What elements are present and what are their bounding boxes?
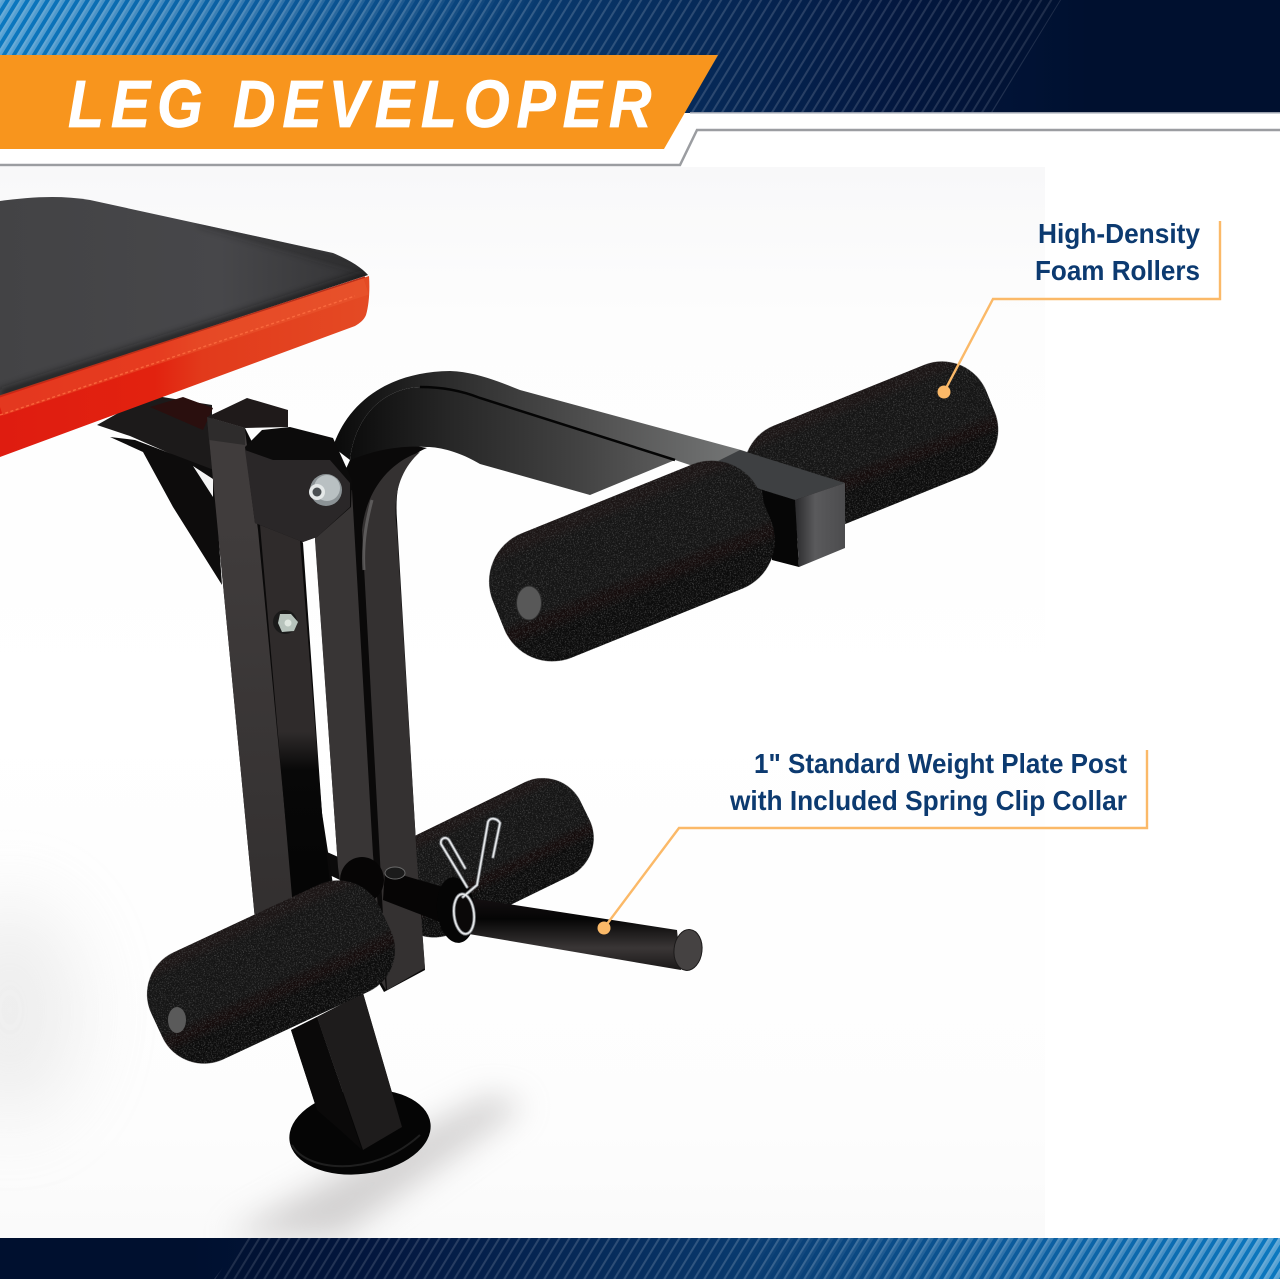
- header band: [0, 0, 1280, 114]
- leader dot: [938, 386, 950, 398]
- pivot bolt: [309, 474, 342, 506]
- tube highlight: [364, 500, 372, 570]
- plate post: [383, 867, 704, 972]
- tube left face: [315, 490, 386, 990]
- angled brace: [110, 437, 222, 585]
- title banner: [0, 55, 718, 149]
- roller end cap: [516, 586, 542, 620]
- pivot arm: [333, 371, 845, 500]
- title: LEG DEVELOPER: [68, 68, 652, 142]
- main upright: [207, 417, 340, 950]
- rear lower roller: [369, 764, 608, 952]
- front lower roller: [132, 865, 410, 1079]
- lower roller end cap: [168, 1007, 186, 1033]
- foot cast shadow: [225, 1095, 525, 1237]
- rear top foam roller: [729, 347, 1013, 553]
- callout text: High-Density: [1038, 218, 1200, 249]
- column over plate: [291, 993, 402, 1150]
- callout text: [1035, 218, 1200, 286]
- seat seam: [0, 277, 365, 396]
- post shaft: [463, 897, 681, 970]
- post nut: [385, 867, 405, 879]
- arm side: [350, 387, 675, 495]
- upright inner face: [260, 525, 332, 920]
- post weld blob: [340, 857, 384, 903]
- base plate rim: [292, 1135, 420, 1166]
- callout text: Foam Rollers: [1035, 255, 1200, 286]
- spring clip collar: [441, 819, 500, 935]
- front top foam roller: [473, 445, 791, 677]
- photo backdrop: [0, 167, 1045, 1238]
- post inner section: [383, 870, 443, 922]
- leader line: [944, 221, 1220, 392]
- product: leg developer bench: [0, 197, 1013, 1182]
- base plate: [284, 1082, 436, 1182]
- callout text: [729, 748, 1127, 816]
- leader dot: [598, 922, 610, 934]
- collar: [434, 875, 478, 945]
- curved support tube: [315, 440, 427, 992]
- tube right face: [362, 452, 425, 990]
- callout: weight plate post: [598, 748, 1147, 934]
- plate post back section: [290, 836, 345, 880]
- callout: foam rollers: [938, 218, 1220, 398]
- callout text: with Included Spring Clip Collar: [729, 785, 1127, 816]
- upright cap: [207, 398, 288, 445]
- under-seat tube: [150, 397, 213, 430]
- seat stitching: [0, 296, 355, 415]
- seat top: [0, 197, 368, 396]
- brace gap: [193, 466, 213, 497]
- seat pad: [0, 197, 370, 457]
- post end cap: [672, 928, 704, 972]
- pivot bracket plate: [245, 427, 352, 542]
- footer band: [0, 1238, 1280, 1279]
- upright front face: [207, 417, 296, 930]
- square arm end: [700, 450, 845, 567]
- header diagonal stripes: [0, 0, 1061, 113]
- upright outer silhouette: [207, 417, 340, 950]
- arm edge: [420, 387, 675, 460]
- floor shadow left: [0, 900, 80, 1120]
- footer diagonal stripes: [214, 1238, 1280, 1279]
- orange seam band: [0, 286, 366, 407]
- leader line: [604, 750, 1147, 928]
- callout text: 1" Standard Weight Plate Post: [754, 748, 1127, 779]
- bench bracket: [97, 395, 212, 472]
- small hex bolt: [273, 610, 298, 634]
- lower column: [291, 993, 402, 1150]
- seat edge shading: [0, 222, 370, 394]
- cap front: [207, 417, 245, 445]
- header under-line: [0, 130, 1280, 165]
